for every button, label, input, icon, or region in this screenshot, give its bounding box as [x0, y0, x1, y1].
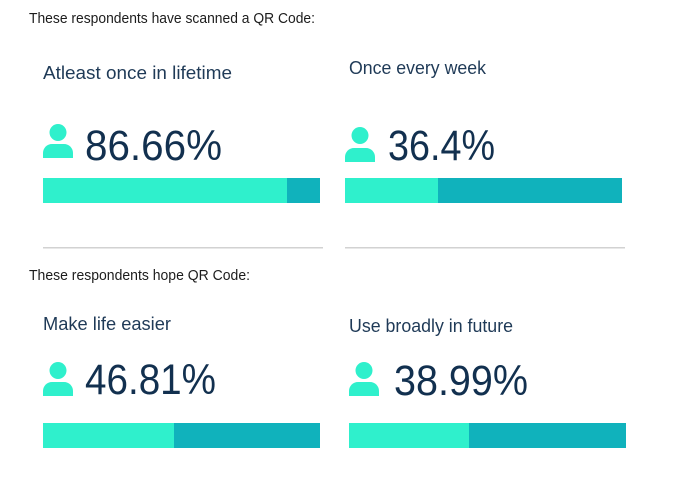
- value: 36.4%: [388, 122, 495, 170]
- heading: scanned a QR Code: These respondents have scanned a QR Code:: [29, 10, 315, 27]
- panel: use broadly in future: [349, 315, 626, 448]
- icon: person: [345, 127, 375, 162]
- panel: atleast once in lifetime: [43, 62, 320, 203]
- panel: once every week: [345, 57, 622, 203]
- progress bar: [349, 423, 626, 448]
- value: 46.81%: [85, 356, 216, 404]
- progress bar: [345, 178, 622, 203]
- value: 38.99%: [394, 357, 528, 405]
- icon: person: [43, 124, 73, 158]
- panel: make life easier: [43, 313, 320, 448]
- label: Make life easier: [43, 313, 171, 334]
- value: 86.66%: [85, 122, 222, 170]
- progress bar: [43, 178, 320, 203]
- label: Use broadly in future: [349, 315, 513, 336]
- progress bar: [43, 423, 320, 448]
- label: Once every week: [349, 57, 487, 78]
- heading: hope QR Code: These respondents hope QR Code:: [29, 267, 250, 284]
- icon: person: [43, 362, 73, 396]
- icon: person: [349, 362, 379, 396]
- label: Atleast once in lifetime: [43, 62, 232, 83]
